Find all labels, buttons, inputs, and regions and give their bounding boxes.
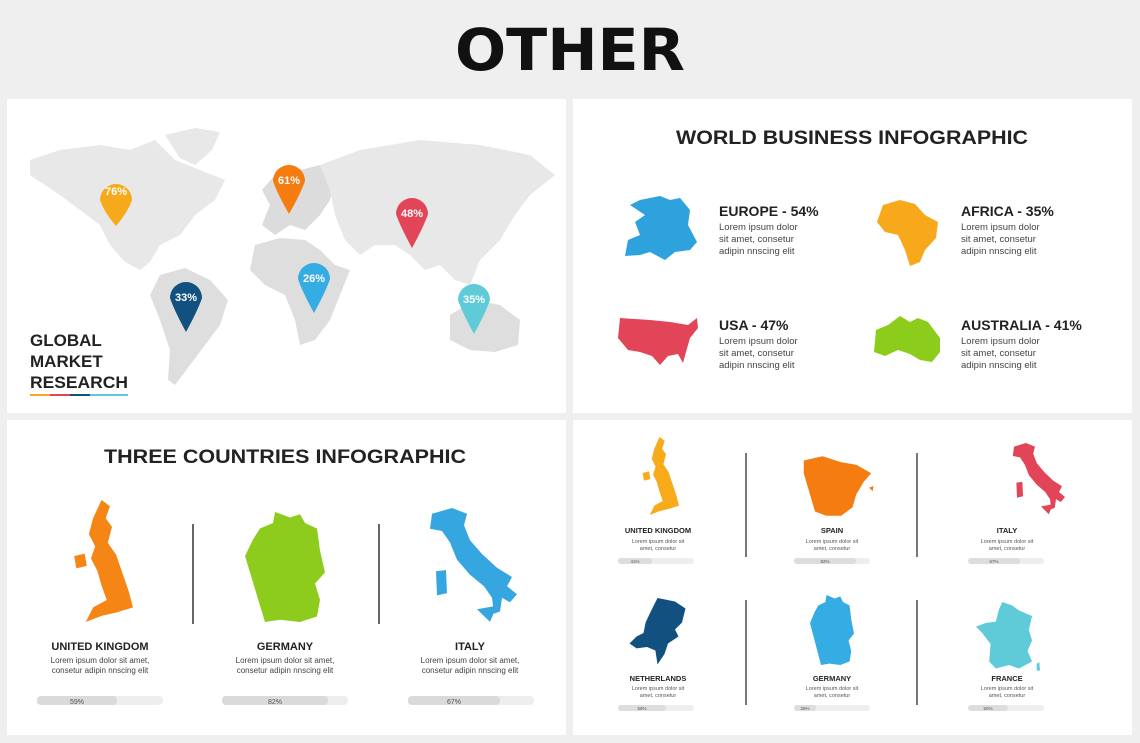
item: usa text: USA - 47% xyxy=(719,317,789,333)
item: usa text xyxy=(719,317,798,371)
item: australia text: adipin nnscing elit xyxy=(961,360,1037,371)
column: united kingdom small xyxy=(618,437,694,564)
column: france: amet, consetur xyxy=(989,693,1025,699)
column: spain: 82% xyxy=(820,559,830,564)
pin 61% xyxy=(273,165,305,214)
column: italy: ITALY xyxy=(455,641,486,653)
column: italy small: Lorem ipsum dolor sit xyxy=(981,539,1034,545)
column: italy: consetur adipin nnscing elit xyxy=(422,666,519,675)
column: united kingdom small: UNITED KINGDOM xyxy=(625,526,691,535)
column: united kingdom: 59% xyxy=(70,699,84,706)
icon: africa xyxy=(877,200,938,266)
item: europe text: Lorem ipsum dolor xyxy=(719,222,798,233)
item: australia text xyxy=(961,317,1082,371)
column: united kingdom small: 41% xyxy=(630,559,640,564)
item: usa text: adipin nnscing elit xyxy=(719,360,795,371)
item: africa text: AFRICA - 35% xyxy=(961,203,1054,219)
column: germany: consetur adipin nnscing elit xyxy=(237,666,334,675)
column: netherlands xyxy=(618,598,694,711)
panel: six countries xyxy=(573,420,1132,735)
pin 48%: 48% xyxy=(401,208,423,220)
column: germany small: amet, consetur xyxy=(814,693,850,699)
column: united kingdom small: amet, consetur xyxy=(640,546,676,552)
column: united kingdom xyxy=(37,500,163,706)
column: france: FRANCE xyxy=(991,674,1023,683)
item: africa text: Lorem ipsum dolor xyxy=(961,222,1040,233)
heading: global market research: MARKET xyxy=(30,352,103,371)
item: europe text: adipin nnscing elit xyxy=(719,246,795,257)
column: germany small: GERMANY xyxy=(813,674,851,683)
column: france: 50% xyxy=(983,706,993,711)
column: germany: GERMANY xyxy=(257,641,314,653)
column: italy xyxy=(408,508,534,706)
column: spain xyxy=(794,456,874,564)
column: spain: SPAIN xyxy=(821,526,843,535)
item: australia text: Lorem ipsum dolor xyxy=(961,336,1040,347)
item: africa text: adipin nnscing elit xyxy=(961,246,1037,257)
column: spain: amet, consetur xyxy=(814,546,850,552)
item: usa text: sit amet, consetur xyxy=(719,348,794,359)
column: germany small: 28% xyxy=(800,706,810,711)
column: italy small: 67% xyxy=(989,559,999,564)
column: germany small: Lorem ipsum dolor sit xyxy=(806,686,859,692)
column: france xyxy=(968,602,1044,711)
world map xyxy=(30,128,555,385)
icon: europe xyxy=(625,196,697,260)
column: italy small: ITALY xyxy=(997,526,1017,535)
heading: THREE COUNTRIES INFOGRAPHIC xyxy=(104,447,466,468)
pin 61%: 61% xyxy=(278,175,300,187)
item: europe text: EUROPE - 54% xyxy=(719,203,819,219)
column: united kingdom: consetur adipin nnscing elit xyxy=(52,666,149,675)
item: australia text: sit amet, consetur xyxy=(961,348,1036,359)
pin 76% xyxy=(100,184,132,226)
column: netherlands: 59% xyxy=(637,706,647,711)
item: europe text: sit amet, consetur xyxy=(719,234,794,245)
pin 33% xyxy=(170,282,202,332)
item: africa text: sit amet, consetur xyxy=(961,234,1036,245)
heading: global market research: RESEARCH xyxy=(30,373,128,392)
item: africa text xyxy=(961,203,1054,257)
heading: global market research xyxy=(30,331,128,396)
column: united kingdom: UNITED KINGDOM xyxy=(51,641,149,653)
column: united kingdom: Lorem ipsum dolor sit amet, xyxy=(51,656,149,665)
pin 48% xyxy=(396,198,428,248)
column: italy: 67% xyxy=(447,699,461,706)
column: germany: Lorem ipsum dolor sit amet, xyxy=(236,656,334,665)
column: germany: 82% xyxy=(268,699,282,706)
pin 35%: 35% xyxy=(463,294,485,306)
item: usa text: Lorem ipsum dolor xyxy=(719,336,798,347)
pin 76%: 76% xyxy=(105,186,127,198)
column: netherlands: Lorem ipsum dolor sit xyxy=(632,686,685,692)
item: australia text: AUSTRALIA - 41% xyxy=(961,317,1082,333)
panel: world business infographic xyxy=(573,99,1132,413)
panel: global market research xyxy=(7,99,566,413)
panel: three countries infographic xyxy=(7,420,566,735)
column: netherlands: amet, consetur xyxy=(640,693,676,699)
heading: WORLD BUSINESS INFOGRAPHIC xyxy=(676,128,1028,149)
column: italy small: amet, consetur xyxy=(989,546,1025,552)
column: netherlands: NETHERLANDS xyxy=(630,674,686,683)
column: united kingdom small: Lorem ipsum dolor sit xyxy=(632,539,685,545)
pin 26% xyxy=(298,263,330,313)
heading: global market research: GLOBAL xyxy=(30,331,102,350)
icon: australia xyxy=(874,316,940,362)
column: spain: Lorem ipsum dolor sit xyxy=(806,539,859,545)
icon: usa xyxy=(618,318,698,365)
column: france: Lorem ipsum dolor sit xyxy=(981,686,1034,692)
column: italy: Lorem ipsum dolor sit amet, xyxy=(421,656,519,665)
pin 35% xyxy=(458,284,490,334)
column: italy small xyxy=(968,443,1065,564)
column: germany small xyxy=(794,595,870,711)
column: germany xyxy=(222,512,348,706)
pin 26%: 26% xyxy=(303,273,325,285)
title: OTHER xyxy=(455,16,685,84)
pin 33%: 33% xyxy=(175,292,197,304)
item: europe text xyxy=(719,203,819,257)
